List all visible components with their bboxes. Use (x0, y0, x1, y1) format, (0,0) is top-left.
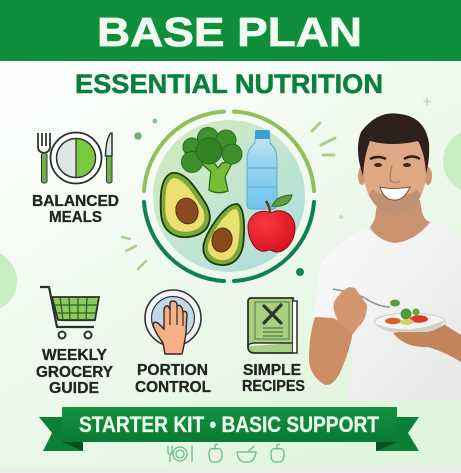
icon: apple outline (271, 444, 284, 462)
feature: portion control (135, 290, 211, 396)
left arm (309, 317, 353, 385)
icon: knife (106, 133, 112, 183)
feature: balanced meals (32, 132, 119, 226)
label: CONTROL (135, 379, 211, 396)
collar shadow (369, 222, 431, 238)
background circle: left (0, 250, 17, 312)
icon: water bottle (247, 130, 277, 209)
label: GUIDE (49, 380, 99, 397)
food on fork (390, 300, 400, 306)
ribbon text: STARTER KIT • BASIC SUPPORT (79, 412, 379, 437)
bottom band (0, 467, 461, 473)
title: BASE PLAN (97, 9, 362, 55)
segmented ring (144, 112, 314, 281)
right arm (393, 325, 461, 362)
icon: plate half filled (50, 132, 102, 184)
icon: apple (248, 195, 295, 252)
label: BALANCED (32, 193, 119, 210)
feature: weekly grocery guide (36, 287, 113, 397)
label (36, 347, 113, 397)
icon: avocado left (161, 173, 210, 237)
label: WEEKLY (42, 347, 107, 364)
head (358, 113, 432, 216)
fork (333, 289, 390, 307)
label (242, 362, 305, 395)
label: GROCERY (36, 364, 113, 381)
feature: simple recipes (242, 298, 305, 395)
man holding a plate of food (309, 113, 461, 400)
label: MEALS (49, 209, 102, 226)
header banner (0, 0, 461, 61)
shirt (315, 222, 461, 400)
ribbon body (62, 407, 397, 442)
inner disc (153, 120, 305, 272)
icon: avocado right (203, 204, 244, 265)
label: RECIPES (242, 378, 305, 395)
row of small food icons (168, 444, 284, 462)
icon: bowl (237, 446, 256, 462)
label (135, 362, 211, 396)
label: PORTION (137, 362, 208, 379)
icon: recipe book (248, 298, 297, 353)
icon: shopping cart (40, 287, 99, 338)
icon: plate with hand (145, 290, 201, 354)
label (32, 193, 119, 226)
label: SIMPLE (243, 362, 301, 379)
ribbon banner (39, 407, 419, 451)
subtitle: ESSENTIAL NUTRITION (75, 69, 383, 99)
decorative sparks and dots (122, 98, 430, 276)
icon: fork (38, 133, 50, 183)
hand (334, 287, 367, 334)
icon: apple outline (209, 444, 222, 462)
background circle: right (443, 129, 461, 193)
ribbon tails (39, 417, 83, 451)
plate with food (374, 308, 446, 332)
icon: broccoli (182, 128, 242, 193)
neck (370, 200, 430, 243)
icon: plate and cutlery (168, 446, 192, 462)
plate illustration (144, 112, 314, 281)
